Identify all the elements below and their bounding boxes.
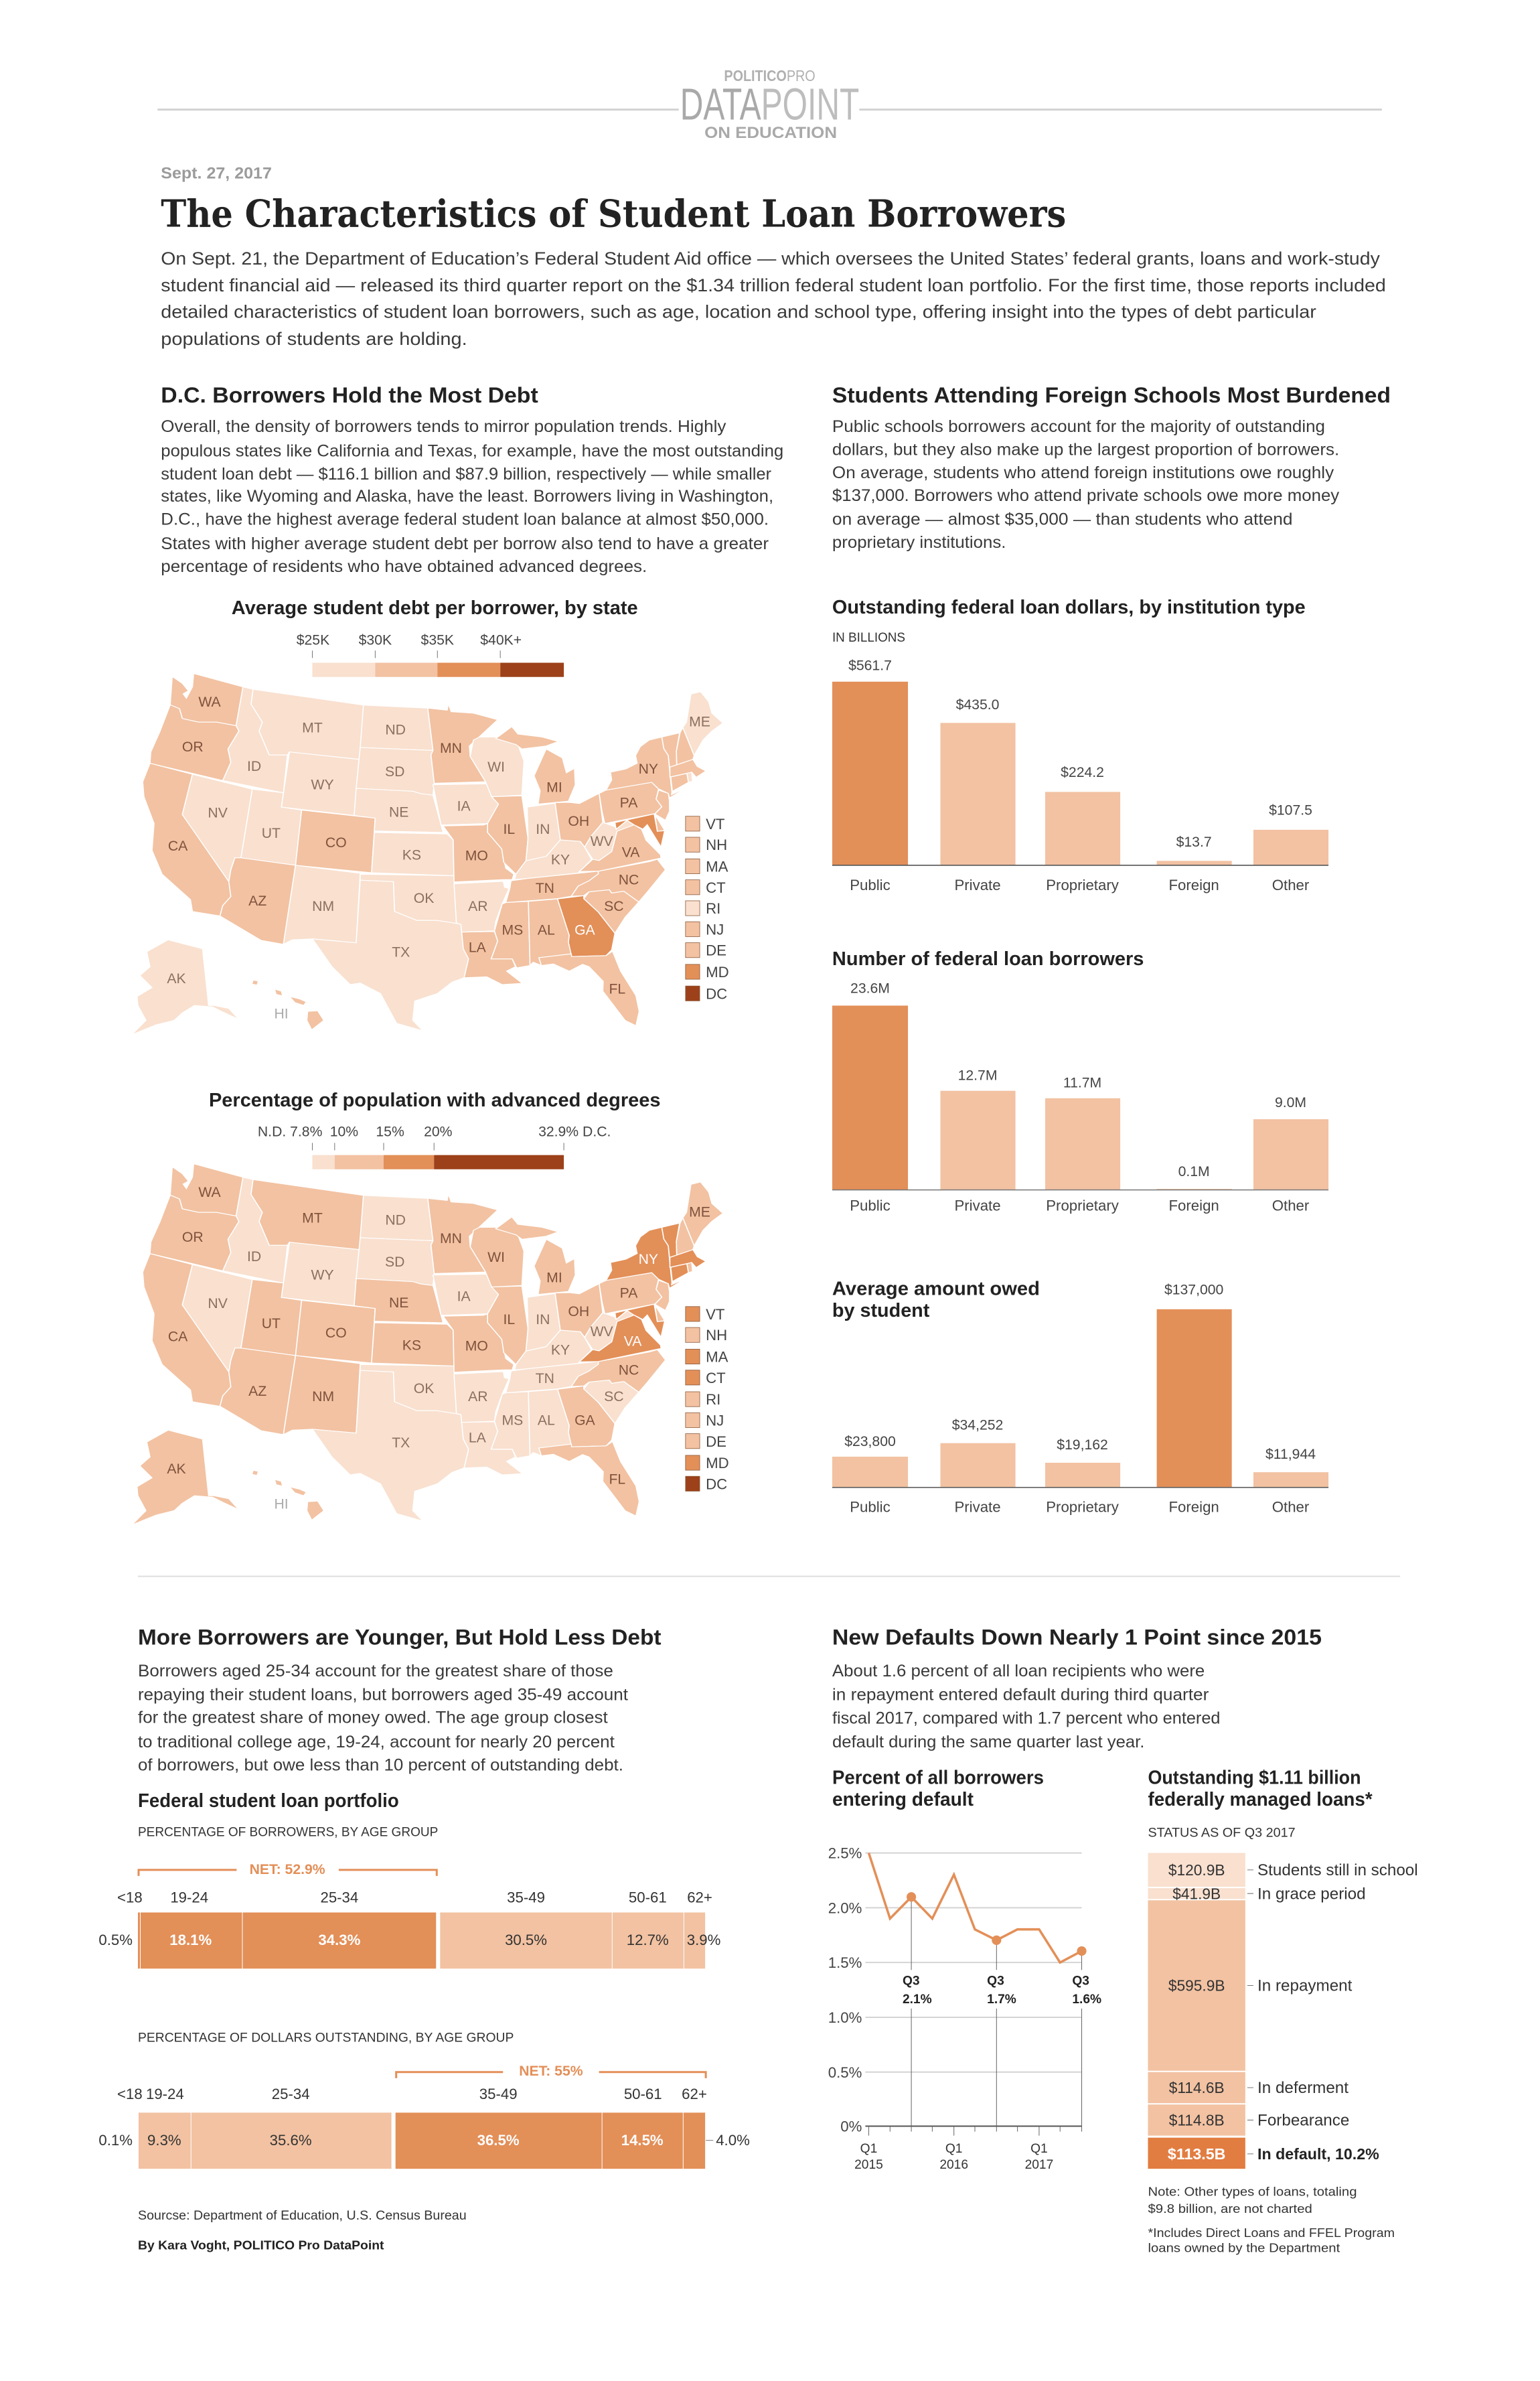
- date: Sept. 27, 2017: [161, 165, 272, 183]
- bar chart: number of borrowers: 23.6M: [850, 981, 890, 996]
- body: Borrowers aged 25-34 account for the greatest share of those: [138, 1662, 613, 1680]
- state labels: debt map: WI: [487, 760, 505, 775]
- state labels: debt map: OK: [414, 891, 434, 906]
- chart heading: federal student loan portfolio: Federal student loan portfolio: [138, 1790, 399, 1811]
- state labels: debt map: SC: [604, 899, 624, 914]
- line chart: percent entering default: Q3: [987, 1974, 1004, 1988]
- state labels: debt map: KS: [402, 847, 421, 863]
- color legend: debt scale: $35K: [421, 632, 454, 648]
- state labels: debt map: VA: [622, 845, 640, 860]
- bar chart: number of borrowers: Proprietary: [1046, 1197, 1120, 1214]
- stacked bar: dollars by age: <18: [117, 2086, 143, 2102]
- state labels: debt map: LA: [469, 940, 487, 956]
- state labels: degree map: [167, 1185, 710, 1512]
- body: repaying their student loans, but borrowers aged 35-49 account: [138, 1685, 628, 1704]
- state labels: degree map: VA: [624, 1333, 642, 1349]
- body: to traditional college age, 19-24, account for nearly 20 percent: [138, 1733, 615, 1751]
- line chart: percent entering default: Percent of all borrowers: [832, 1767, 1044, 1788]
- bar chart: average amount owed: $137,000: [1164, 1283, 1223, 1298]
- bar chart: outstanding loan dollars: Outstanding federal loan dollars, by institution type: [832, 596, 1306, 618]
- state labels: degree map: WV: [591, 1324, 614, 1340]
- heading: Students Attending Foreign Schools Most Burdened: [832, 383, 1391, 407]
- intro paragraph: student financial aid — released its third quarter report on the $1.34 trillion federal student loan portfolio. For the first time, those reports included: [161, 275, 1386, 295]
- color legend: degree scale: 10%: [330, 1124, 358, 1139]
- bar chart: number of borrowers: Public: [850, 1197, 891, 1214]
- bar chart: number of borrowers: Other: [1272, 1197, 1310, 1214]
- state labels: degree map: OK: [414, 1381, 434, 1396]
- legend: small eastern states, debt: DC: [706, 985, 727, 1002]
- state labels: debt map: ID: [247, 759, 261, 774]
- state labels: degree map: ME: [689, 1204, 710, 1220]
- notes: loans owned by the Department: [1148, 2241, 1340, 2254]
- state labels: debt map: CO: [325, 835, 347, 851]
- chart title: average debt map: Average student debt per borrower, by state: [232, 597, 638, 618]
- state labels: debt map: ND: [385, 723, 406, 738]
- panel: D.C. borrowers text: [161, 383, 783, 576]
- stacked bar: borrowers by age: 12.7%: [627, 1932, 669, 1948]
- stacked bar: dollars by age: 4.0%: [716, 2132, 750, 2149]
- stacked bar: dollars by age: 14.5%: [621, 2132, 664, 2149]
- line chart: percent entering default: Q1: [1030, 2142, 1048, 2156]
- bar chart: number of borrowers: Private: [954, 1197, 1001, 1214]
- state labels: degree map: NE: [389, 1295, 408, 1311]
- stacked column: federally managed loans: $595.9B: [1168, 1977, 1225, 1995]
- legend: small eastern states, debt: [686, 816, 729, 1002]
- bar chart: number of borrowers: 12.7M: [958, 1068, 997, 1084]
- color legend: debt scale: [297, 632, 564, 677]
- bar chart: outstanding loan dollars: $13.7: [1176, 835, 1212, 850]
- state labels: degree map: PA: [620, 1286, 638, 1301]
- logo: Politico Pro DataPoint on Education: POLITICOPRO: [724, 67, 816, 84]
- stacked bar: borrowers by age: 18.1%: [169, 1932, 212, 1948]
- line chart: percent entering default: Q3: [903, 1974, 920, 1988]
- stacked bar: borrowers by age: [98, 1825, 720, 1968]
- color legend: degree scale: [258, 1124, 611, 1169]
- state labels: degree map: HI: [274, 1497, 289, 1512]
- body: [832, 1662, 1221, 1751]
- state labels: debt map: WY: [311, 777, 334, 792]
- heading: New Defaults Down Nearly 1 Point since 2015: [832, 1626, 1322, 1650]
- state labels: debt map: WA: [198, 695, 222, 710]
- line chart: percent entering default: 2017: [1025, 2158, 1053, 2172]
- state labels: degree map: IN: [536, 1312, 550, 1327]
- body: On average, students who attend foreign institutions owe roughly: [832, 463, 1334, 482]
- bar chart: average amount owed: Average amount owed: [832, 1278, 1040, 1299]
- state labels: degree map: IA: [457, 1289, 471, 1305]
- color legend: debt scale: $40K+: [480, 632, 522, 648]
- stacked column: federally managed loans: $113.5B: [1168, 2145, 1225, 2163]
- state labels: degree map: UT: [262, 1316, 281, 1331]
- notes: *Includes Direct Loans and FFEL Program: [1148, 2226, 1395, 2240]
- body: Overall, the density of borrowers tends to mirror population trends. Highly: [161, 417, 726, 436]
- state labels: debt map: MT: [302, 721, 323, 736]
- legend: small eastern states, debt: CT: [706, 879, 726, 896]
- bar chart: outstanding loan dollars: Foreign: [1168, 877, 1219, 893]
- state labels: degree map: CA: [168, 1329, 188, 1344]
- state labels: debt map: IN: [536, 822, 550, 837]
- state labels: degree map: MI: [546, 1270, 562, 1285]
- body: populous states like California and Texas, for example, have the most outstanding: [161, 442, 783, 461]
- state labels: degree map: ID: [247, 1249, 261, 1265]
- stacked column: federally managed loans: $41.9B: [1172, 1885, 1221, 1902]
- line chart: percent entering default: 2015: [854, 2158, 883, 2172]
- stacked column: federally managed loans: Students still in school: [1257, 1861, 1418, 1879]
- net bracket 52.9%: NET: 52.9%: [250, 1862, 325, 1877]
- line chart: percent entering default: 2016: [939, 2158, 968, 2172]
- notes: $9.8 billion, are not charted: [1148, 2202, 1312, 2216]
- notes: Note: Other types of loans, totaling: [1148, 2185, 1357, 2199]
- body: About 1.6 percent of all loan recipients who were: [832, 1662, 1205, 1680]
- bar chart: outstanding loan dollars: Public: [850, 877, 891, 893]
- body: proprietary institutions.: [832, 533, 1006, 552]
- color legend: degree scale: 20%: [424, 1124, 453, 1139]
- state labels: degree map: SD: [385, 1254, 404, 1270]
- state labels: debt map: HI: [274, 1007, 289, 1022]
- state labels: degree map: AK: [167, 1461, 186, 1477]
- bar chart: number of borrowers: 11.7M: [1063, 1076, 1101, 1091]
- stacked bar: borrowers by age: PERCENTAGE OF BORROWERS, BY AGE GROUP: [138, 1825, 438, 1839]
- state labels: degree map: NY: [639, 1252, 658, 1267]
- stacked bar: dollars by age: 36.5%: [477, 2132, 520, 2149]
- line chart: percent entering default: 0%: [840, 2118, 862, 2135]
- stacked column: federally managed loans: $120.9B: [1168, 1861, 1225, 1879]
- color legend: debt scale: $30K: [359, 632, 392, 648]
- state labels: degree map: WA: [198, 1185, 222, 1200]
- stacked bar: borrowers by age: 0.5%: [98, 1932, 133, 1948]
- bar chart: average amount owed: Private: [954, 1499, 1001, 1516]
- state labels: degree map: FL: [609, 1471, 625, 1487]
- state labels: debt map: IA: [457, 799, 471, 814]
- map: advanced degrees by state: [132, 1164, 723, 1525]
- state labels: debt map: IL: [503, 822, 515, 837]
- state labels: debt map: PA: [620, 796, 638, 811]
- state labels: debt map: GA: [574, 922, 596, 938]
- state labels: debt map: TX: [392, 945, 410, 960]
- body: of borrowers, but owe less than 10 percent of outstanding debt.: [138, 1755, 623, 1774]
- state labels: degree map: OH: [568, 1304, 589, 1319]
- legend: small eastern states, degrees: CT: [706, 1370, 726, 1386]
- line chart: percent entering default: 2.0%: [828, 1899, 862, 1916]
- body: dollars, but they also make up the largest proportion of borrowers.: [832, 441, 1339, 459]
- bar chart: average amount owed: [832, 1278, 1328, 1516]
- line chart: percent entering default: 1.6%: [1072, 1993, 1101, 2007]
- notes: [1148, 2185, 1395, 2254]
- body: [832, 417, 1340, 552]
- stacked bar: borrowers by age: 35-49: [507, 1889, 545, 1905]
- state labels: degree map: MN: [440, 1231, 462, 1246]
- state labels: debt map: NY: [639, 762, 658, 777]
- panel: foreign schools text: [832, 383, 1391, 552]
- intro paragraph: detailed characteristics of student loan borrowers, such as age, location and school type, offering insight into the types of debt particular: [161, 301, 1316, 322]
- line chart: percent entering default: 2.5%: [828, 1845, 862, 1862]
- stacked column: federally managed loans: In deferment: [1257, 2079, 1349, 2097]
- state labels: debt map: CA: [168, 839, 188, 854]
- legend: small eastern states, degrees: [686, 1306, 729, 1492]
- line chart: percent entering default: 2.1%: [903, 1993, 932, 2007]
- state labels: degree map: GA: [574, 1413, 596, 1428]
- bar chart: number of borrowers: 0.1M: [1178, 1164, 1210, 1179]
- stacked bar: borrowers by age: 19-24: [170, 1889, 208, 1905]
- logo: Politico Pro DataPoint on Education: [157, 67, 1382, 142]
- stacked bar: borrowers by age: 25-34: [320, 1889, 358, 1905]
- byline: By Kara Voght, POLITICO Pro DataPoint: [138, 2238, 384, 2252]
- legend: small eastern states, debt: MD: [706, 964, 729, 981]
- legend: small eastern states, degrees: NJ: [706, 1412, 724, 1429]
- bar chart: average amount owed: Proprietary: [1046, 1499, 1120, 1516]
- stacked column: federally managed loans: In grace period: [1257, 1885, 1366, 1903]
- state labels: debt map: MI: [546, 780, 562, 795]
- stacked column: federally managed loans: In repayment: [1257, 1977, 1353, 1995]
- bar chart: outstanding loan dollars: Other: [1272, 877, 1310, 893]
- bar chart: outstanding loan dollars: [832, 596, 1328, 893]
- state labels: degree map: NV: [208, 1296, 228, 1311]
- state labels: debt map: NM: [312, 899, 334, 914]
- stacked bar: dollars by age: 62+: [682, 2086, 707, 2102]
- bar chart: average amount owed: $34,252: [952, 1418, 1003, 1433]
- state labels: degree map: IL: [503, 1312, 515, 1327]
- state labels: debt map: SD: [385, 764, 404, 780]
- bar chart: number of borrowers: Number of federal loan borrowers: [832, 948, 1144, 969]
- body: States with higher average student debt per borrow also tend to have a greater: [161, 534, 769, 553]
- line chart: percent entering default: 0.5%: [828, 2064, 862, 2081]
- state labels: degree map: NM: [312, 1389, 334, 1404]
- legend: small eastern states, debt: VT: [706, 816, 725, 833]
- state labels: degree map: MT: [302, 1211, 323, 1226]
- stacked bar: borrowers by age: 3.9%: [687, 1932, 720, 1948]
- bar chart: average amount owed: Public: [850, 1499, 891, 1516]
- state labels: debt map: MN: [440, 741, 462, 756]
- body: [138, 1662, 628, 1774]
- state labels: debt map: OR: [182, 739, 204, 755]
- body: percentage of residents who have obtained advanced degrees.: [161, 557, 647, 576]
- bar chart: number of borrowers: [832, 948, 1328, 1214]
- legend: small eastern states, degrees: MD: [706, 1455, 729, 1471]
- bar chart: average amount owed: Foreign: [1168, 1499, 1219, 1516]
- stacked column: federally managed loans: $114.8B: [1169, 2112, 1225, 2129]
- state labels: degree map: AR: [468, 1389, 488, 1404]
- state labels: degree map: AL: [538, 1413, 555, 1428]
- state labels: debt map: OH: [568, 814, 589, 829]
- stacked bar: borrowers by age: 62+: [687, 1889, 712, 1905]
- source: Sourcse: Department of Education, U.S. Census Bureau: [138, 2209, 467, 2223]
- state labels: debt map: AL: [538, 922, 555, 938]
- body: on average — almost $35,000 — than students who attend: [832, 510, 1293, 529]
- line chart: percent entering default: 1.5%: [828, 1954, 862, 1971]
- state labels: degree map: CO: [325, 1325, 347, 1341]
- bar chart: number of borrowers: Foreign: [1168, 1197, 1219, 1214]
- legend: small eastern states, debt: RI: [706, 900, 720, 917]
- state labels: degree map: OR: [182, 1230, 204, 1245]
- body: $137,000. Borrowers who attend private schools owe more money: [832, 486, 1340, 505]
- state labels: debt map: [167, 695, 710, 1022]
- body: for the greatest share of money owed. The age group closest: [138, 1709, 608, 1727]
- state labels: debt map: MS: [502, 922, 523, 938]
- stacked bar: dollars by age: 50-61: [624, 2086, 662, 2102]
- bar chart: average amount owed: by student: [832, 1299, 930, 1321]
- state labels: debt map: AK: [167, 971, 186, 987]
- legend: small eastern states, degrees: NH: [706, 1327, 727, 1344]
- stacked column: federally managed loans: STATUS AS OF Q3 2017: [1148, 1826, 1296, 1840]
- state labels: degree map: WI: [487, 1250, 505, 1265]
- intro paragraph: On Sept. 21, the Department of Education’s Federal Student Aid office — which oversees the United States’ federal grants, loans and work-study: [161, 248, 1380, 269]
- state labels: degree map: KY: [551, 1342, 570, 1358]
- legend: small eastern states, degrees: MA: [706, 1349, 728, 1366]
- bar chart: outstanding loan dollars: Private: [954, 877, 1001, 893]
- body: default during the same quarter last year.: [832, 1733, 1144, 1751]
- net bracket 52.9%: [139, 1862, 437, 1877]
- title: The Characteristics of Student Loan Borrowers: [161, 192, 1066, 236]
- state labels: debt map: KY: [551, 852, 570, 867]
- state labels: degree map: TX: [392, 1435, 410, 1451]
- bar chart: average amount owed: Other: [1272, 1499, 1310, 1516]
- state labels: debt map: ME: [689, 714, 710, 729]
- intro paragraph: populations of students are holding.: [161, 328, 467, 349]
- color legend: degree scale: N.D. 7.8%: [258, 1124, 323, 1139]
- bar chart: outstanding loan dollars: $435.0: [956, 697, 999, 713]
- legend: small eastern states, degrees: VT: [706, 1306, 725, 1323]
- bar chart: number of borrowers: 9.0M: [1275, 1095, 1306, 1110]
- legend: small eastern states, debt: NH: [706, 837, 727, 853]
- state labels: degree map: MO: [465, 1338, 488, 1354]
- stacked column: federally managed loans: Outstanding $1.11 billion: [1148, 1767, 1361, 1788]
- bar chart: outstanding loan dollars: $561.7: [848, 658, 892, 674]
- legend: small eastern states, degrees: DE: [706, 1433, 726, 1450]
- stacked column: federally managed loans: In default, 10.2%: [1257, 2145, 1379, 2163]
- body: student loan debt — $116.1 billion and $87.9 billion, respectively — while smaller: [161, 465, 771, 484]
- legend: small eastern states, degrees: RI: [706, 1391, 720, 1408]
- intro paragraph: [161, 248, 1386, 349]
- body: [161, 417, 783, 576]
- stacked column: federally managed loans: [1148, 1767, 1418, 2169]
- body: D.C., have the highest average federal student loan balance at almost $50,000.: [161, 510, 769, 529]
- heading: More Borrowers are Younger, But Hold Less Debt: [138, 1626, 662, 1650]
- state labels: debt map: NV: [208, 806, 228, 821]
- stacked bar: dollars by age: 25-34: [272, 2086, 310, 2102]
- stacked column: federally managed loans: $114.6B: [1169, 2079, 1225, 2096]
- color legend: degree scale: 15%: [376, 1124, 404, 1139]
- state labels: debt map: NE: [389, 805, 408, 820]
- stacked bar: borrowers by age: <18: [117, 1889, 143, 1905]
- stacked bar: dollars by age: PERCENTAGE OF DOLLARS OUTSTANDING, BY AGE GROUP: [138, 2031, 514, 2045]
- state labels: degree map: NC: [619, 1363, 639, 1378]
- stacked column: federally managed loans: federally managed loans*: [1148, 1788, 1373, 1810]
- line chart: percent entering default: 1.7%: [987, 1993, 1016, 2007]
- state labels: debt map: AZ: [248, 893, 266, 909]
- bar chart: average amount owed: $19,162: [1057, 1437, 1108, 1453]
- logo: Politico Pro DataPoint on Education: DATAPOINT: [680, 80, 859, 130]
- bar chart: average amount owed: $11,944: [1265, 1447, 1316, 1462]
- state labels: debt map: UT: [262, 826, 281, 841]
- state labels: debt map: MO: [465, 848, 488, 863]
- bar chart: outstanding loan dollars: IN BILLIONS: [832, 631, 905, 645]
- logo: Politico Pro DataPoint on Education: ON EDUCATION: [704, 124, 837, 142]
- panel: defaults text: [832, 1626, 1322, 1751]
- stacked bar: borrowers by age: 50-61: [629, 1889, 667, 1905]
- line chart: percent entering default: Q3: [1072, 1974, 1089, 1988]
- map: average student debt by state: [132, 674, 723, 1035]
- body: Public schools borrowers account for the majority of outstanding: [832, 417, 1325, 436]
- net bracket 55%: NET: 55%: [519, 2064, 583, 2079]
- legend: small eastern states, degrees: DC: [706, 1475, 727, 1492]
- body: states, like Wyoming and Alaska, have the least. Borrowers living in Washington,: [161, 487, 773, 506]
- state labels: degree map: SC: [604, 1389, 624, 1404]
- stacked bar: borrowers by age: 30.5%: [505, 1932, 547, 1948]
- line chart: percent entering default: 1.0%: [828, 2009, 862, 2026]
- state labels: degree map: KS: [402, 1338, 421, 1353]
- state labels: debt map: TN: [536, 881, 554, 896]
- panel: younger borrowers text: [138, 1626, 662, 1774]
- state labels: degree map: TN: [536, 1371, 554, 1386]
- legend: small eastern states, debt: MA: [706, 859, 728, 875]
- state labels: degree map: AZ: [248, 1384, 266, 1399]
- stacked bar: dollars by age: 35.6%: [270, 2132, 312, 2149]
- bar chart: outstanding loan dollars: $107.5: [1269, 803, 1312, 818]
- state labels: debt map: NC: [619, 873, 639, 888]
- line chart: percent entering default: Q1: [945, 2142, 962, 2156]
- line chart: percent entering default: entering default: [832, 1788, 974, 1810]
- stacked column: federally managed loans: Forbearance: [1257, 2112, 1349, 2130]
- stacked bar: dollars by age: 9.3%: [147, 2132, 181, 2149]
- stacked bar: borrowers by age: 34.3%: [318, 1932, 361, 1948]
- bar chart: outstanding loan dollars: $224.2: [1061, 765, 1104, 780]
- stacked bar: dollars by age: 35-49: [479, 2086, 518, 2102]
- body: fiscal 2017, compared with 1.7 percent who entered: [832, 1709, 1221, 1728]
- body: in repayment entered default during third quarter: [832, 1685, 1209, 1704]
- legend: small eastern states, debt: NJ: [706, 921, 724, 938]
- color legend: debt scale: $25K: [297, 632, 329, 648]
- chart title: advanced degrees map: Percentage of population with advanced degrees: [209, 1089, 660, 1110]
- state labels: degree map: LA: [469, 1431, 487, 1446]
- line chart: percent entering default: [828, 1767, 1101, 2172]
- legend: small eastern states, debt: DE: [706, 942, 726, 959]
- state labels: degree map: MS: [502, 1413, 523, 1428]
- stacked bar: dollars by age: 0.1%: [98, 2132, 133, 2149]
- heading: D.C. Borrowers Hold the Most Debt: [161, 383, 538, 407]
- stacked bar: dollars by age: [98, 2031, 750, 2169]
- stacked bar: dollars by age: 19-24: [146, 2086, 184, 2102]
- state labels: debt map: FL: [609, 981, 625, 997]
- state labels: debt map: WV: [591, 834, 614, 849]
- net bracket 55%: [396, 2064, 706, 2079]
- line chart: percent entering default: Q1: [860, 2142, 877, 2156]
- bar chart: average amount owed: $23,800: [844, 1434, 896, 1449]
- color legend: degree scale: 32.9% D.C.: [538, 1124, 611, 1139]
- state labels: degree map: WY: [311, 1267, 334, 1283]
- state labels: debt map: AR: [468, 899, 488, 914]
- state labels: degree map: ND: [385, 1213, 406, 1228]
- bar chart: outstanding loan dollars: Proprietary: [1046, 877, 1120, 893]
